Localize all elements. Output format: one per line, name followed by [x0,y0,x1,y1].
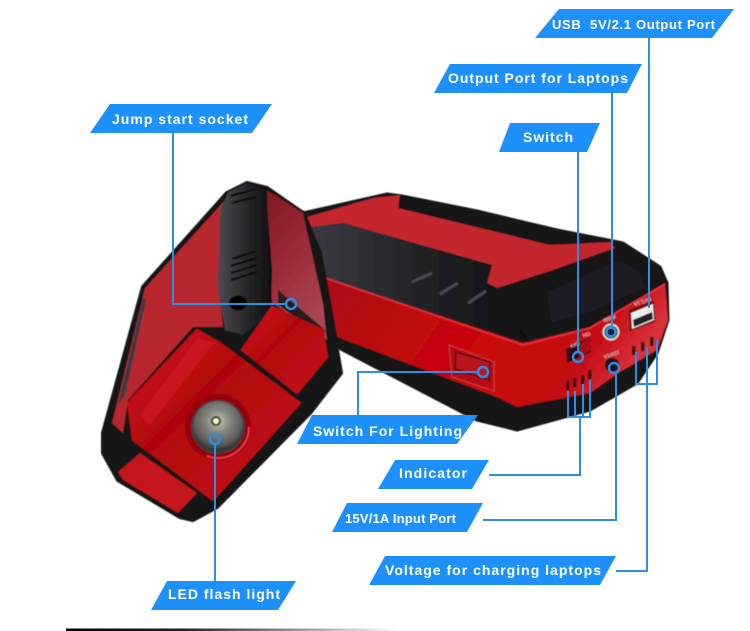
usb port [629,295,655,331]
label: output port for laptops [434,64,642,93]
connector: switch [573,152,583,362]
label: voltage for charging laptops [369,556,616,585]
label: LED flash light: LED flash light [168,586,280,602]
rear device red band highlight [325,278,665,345]
laptop output port [602,313,620,340]
label: input port: 15V/1A Input Port [345,511,457,526]
connector: laptop output [606,93,616,336]
front device black strip [218,183,272,335]
label: indicator [378,460,489,489]
rear device fabric top [307,195,615,288]
front red face [128,330,300,500]
connector: voltage selector [616,340,657,571]
lighting switch recess [449,345,494,391]
label: switch for lighting [297,415,478,444]
front device black silhouette [103,183,341,520]
front device fabric panel [112,198,227,433]
lighting switch button [455,352,490,380]
connector: usb output [648,38,650,308]
device: rear power bank [303,194,668,430]
input port [602,348,620,372]
label: LED flash light [151,581,296,610]
voltage selector leds [632,337,654,355]
input port: 15V/1A [602,348,620,360]
laptop output port: IP600 [602,313,617,323]
rear device end cap recess [547,260,645,322]
connector: switch for lighting [358,367,488,415]
label: USB output port [535,9,734,38]
label: output port for laptops: Output Port for Laptops [448,70,628,86]
label: input port [332,503,483,532]
red metal side piece [242,307,327,393]
rear device red band [325,278,668,407]
bottom rule [66,628,400,631]
connector: jump start socket [173,133,296,309]
label: jump start socket: Jump start socket [112,111,248,127]
jump start socket [229,296,247,310]
usb port: 5V/2.1A [632,295,652,307]
connector: input port [483,363,619,520]
label: jump start socket [90,104,272,133]
side window [278,290,325,340]
connector: led flash light [210,434,220,581]
rear device black body [303,194,668,430]
led lens [185,394,251,460]
connector: indicator [489,380,590,475]
label: USB output port: USB 5V/2.1 Output Port [552,17,716,32]
strip ridges [231,189,257,280]
device: front power bank [103,183,341,520]
on off slide switch: OFF [569,339,580,348]
label: switch for lighting: Switch For Lighting [313,423,462,439]
front face highlight [140,338,214,425]
label: switch: Switch [523,129,573,145]
bottom red corner [118,453,197,513]
on off slide switch [566,330,591,363]
rear device rubber grip [310,223,530,342]
front device side recess [118,298,146,405]
on off slide switch: ON [581,330,591,338]
front device dark red side [267,190,327,340]
battery indicator leds [566,370,592,390]
label: indicator: Indicator [399,465,468,481]
rear device grip ridges [412,273,486,303]
label: switch [499,123,600,152]
label: voltage for charging laptops: Voltage for charging laptops [385,562,601,578]
